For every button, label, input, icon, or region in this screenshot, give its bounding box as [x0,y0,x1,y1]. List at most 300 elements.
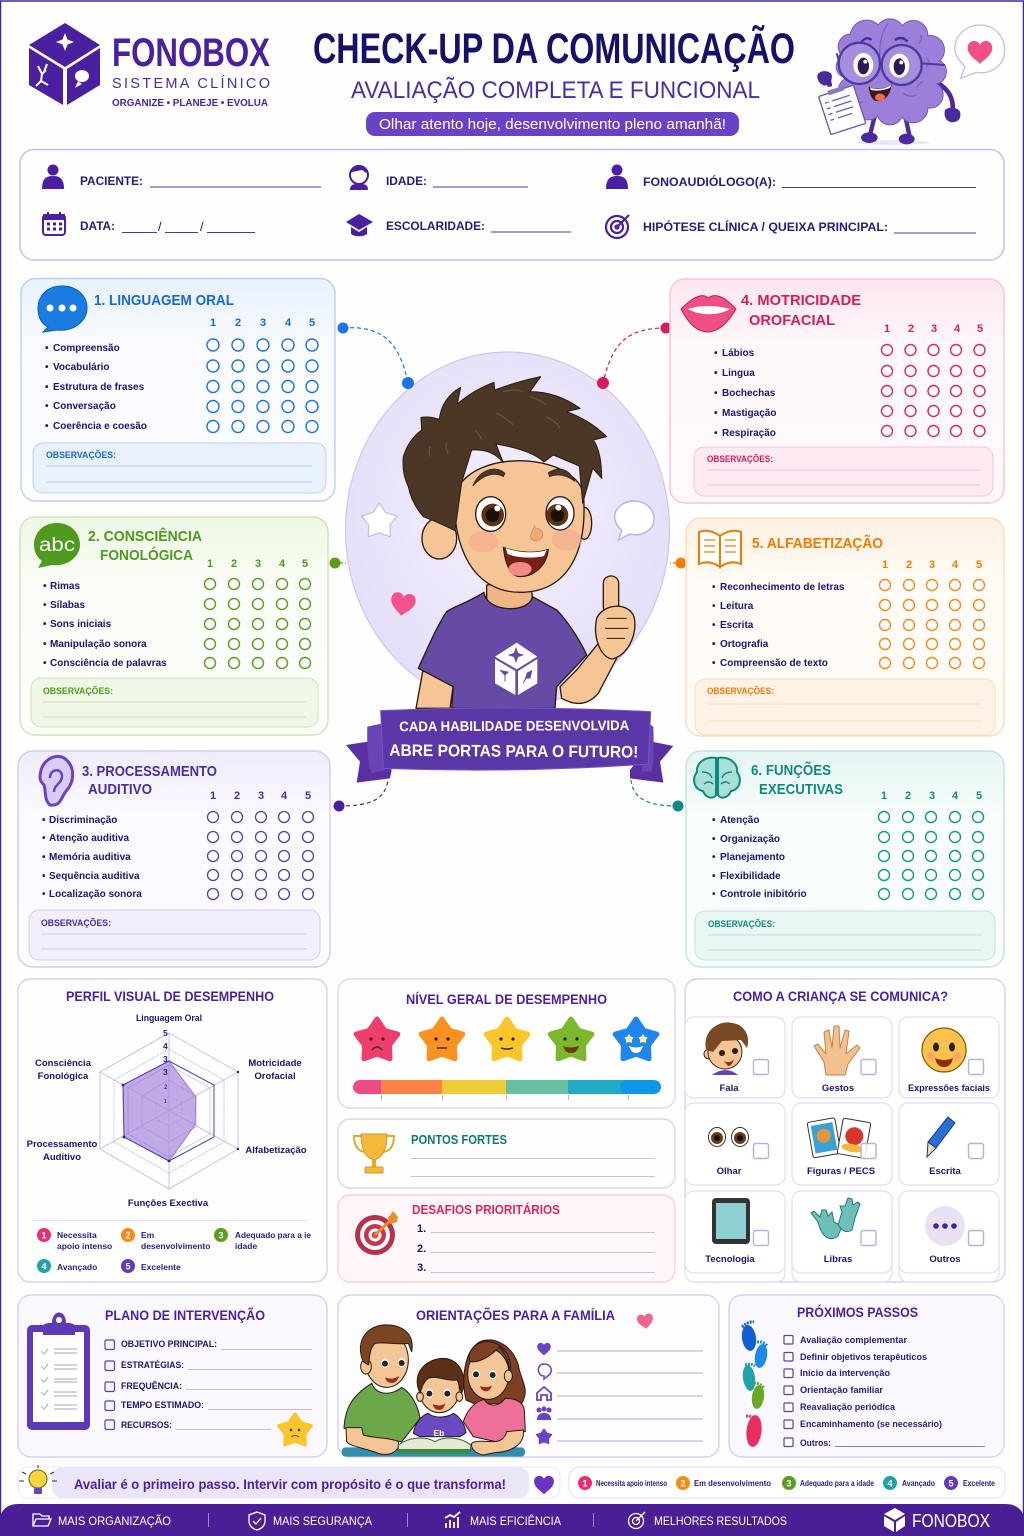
panel: plano de intervencao [18,1295,327,1457]
scale numbers [207,558,308,570]
score legend [37,1228,311,1273]
star: level 5 [615,1019,657,1059]
heading: EXECUTIVAS [759,781,843,798]
option: tecnologia [705,1198,755,1265]
skills list: Controle inibitório [720,889,807,900]
icon: child [350,165,368,190]
icon: star [279,1414,311,1445]
skills list: • [712,601,716,612]
icon: folder [33,1514,51,1526]
field: data: / [200,219,204,234]
rating circles [208,812,314,900]
skills list [43,581,167,669]
radar chart: 3 [163,1054,168,1064]
skills list: Lábios [722,348,755,359]
legend item 4: Avançado [902,1478,935,1488]
icon: logo cube [29,23,100,105]
legend bar [569,1467,1005,1498]
legend item 3: Adequado para a idade [800,1478,874,1488]
scale numbers [210,790,311,802]
legend item 1: 1 [582,1478,588,1488]
skills list: Compreensão [53,343,120,354]
icon: clipboard [27,1312,90,1430]
score legend: apoio intenso [57,1241,112,1251]
skills list: Flexibilidade [720,871,781,882]
banner text: CADA HABILIDADE DESENVOLVIDA [399,717,629,734]
checklist: Reavaliação periódica [800,1402,896,1412]
scale numbers: 1 [210,317,216,329]
tagline: SISTEMA CLÍNICO [112,75,270,92]
legend item 2: 2 [680,1478,686,1488]
label: MAIS EFICIÊNCIA [470,1513,561,1528]
skills list: Sílabas [50,600,85,611]
rating circles [207,339,318,432]
heading: PRÓXIMOS PASSOS [797,1303,918,1320]
icon: abc bubble [34,523,80,568]
checklist: Avaliação complementar [800,1335,907,1345]
panel: como a crianca se comunica [685,979,1005,1282]
panel: 6 funcoes executivas [686,751,1004,967]
star: level 3 [486,1019,528,1059]
scale numbers: 2 [908,323,914,335]
heading [751,761,843,798]
skills list: • [43,658,47,669]
decor: heart [389,591,417,618]
icon: ear [40,756,73,805]
field: idade: IDADE: [386,174,427,188]
field: hipotese: HIPÓTESE CLÍNICA / QUEIXA PRINCIPAL: [643,219,888,234]
skills list: Planejamento [720,852,785,863]
scale numbers: 5 [976,790,982,802]
heading: ORIENTAÇÕES PARA A FAMÍLIA [416,1306,615,1323]
icon: shield [249,1512,265,1530]
scale numbers: 2 [234,790,240,802]
option: outros [925,1206,965,1265]
scale numbers: 5 [309,317,315,329]
legend item 1: Necessita apoio intenso [596,1478,667,1488]
legend item 1 [578,1476,667,1490]
score legend: Excelente [141,1262,181,1272]
lines [557,1351,703,1441]
radar chart: 3 [163,1067,168,1077]
checklist: ESTRATÉGIAS: [121,1360,184,1371]
heading [741,292,861,329]
panel: orientacoes para a familia [338,1295,719,1457]
radar chart [27,1013,307,1209]
observations box: OBSERVAÇÕES: [46,450,116,461]
panel: 2 consciencia fonologica [20,517,328,735]
scale numbers: 5 [302,558,308,570]
observations box [31,678,318,727]
scale numbers: 5 [976,559,982,571]
skills list: • [712,889,716,900]
scale numbers: 1 [884,323,890,335]
skills list: • [712,834,716,845]
axis label: Auditivo [43,1152,81,1163]
icon: target [628,1512,645,1528]
skills list: • [714,408,718,419]
skills list: Escrita [720,620,754,631]
mascot: brain with glasses [817,19,1005,145]
skills list [45,343,147,432]
title: CHECK-UP DA COMUNICAÇÃO [313,25,795,73]
checklist: Início da intervenção [800,1368,890,1378]
checkboxes [754,1060,984,1246]
skills list: Localização sonora [49,889,142,900]
heading: PLANO DE INTERVENÇÃO [105,1306,265,1323]
field: fonoaudiologo: FONOAUDIÓLOGO(A): [643,174,776,189]
footer bar [0,1504,1024,1536]
icon: brain [694,758,740,798]
brand: FONOBOX [912,1511,990,1531]
rating circles [204,578,310,668]
slogan: ORGANIZE • PLANEJE • EVOLUA [112,97,268,109]
score legend: 5 [125,1262,131,1272]
option: gestos: Gestos [822,1083,854,1094]
option: fala: Fala [719,1083,739,1094]
observations box: OBSERVAÇÕES: [41,918,111,929]
axis label [35,1058,92,1082]
score legend: 4 [41,1262,47,1272]
rating circles [880,580,984,668]
skills list: • [712,658,716,669]
field: data: DATA: [80,219,115,233]
decor: white star [362,503,397,537]
icon: open book [699,531,741,567]
legend item 5 [944,1476,995,1490]
option: fala [704,1022,748,1094]
option: figuras / pecs [807,1118,875,1177]
skills list: • [42,815,46,826]
panel: proximos passos [729,1295,1004,1457]
scale numbers: 4 [954,323,961,335]
skills list: • [712,852,716,863]
axis label: Processamento [27,1139,98,1150]
field: paciente: PACIENTE: [80,174,143,188]
scale numbers: 2 [906,559,912,571]
option: expressoes faciais [908,1028,990,1094]
panel: 1 linguagem oral [21,278,335,501]
scale numbers: 4 [952,790,959,802]
skills list: Conversação [53,401,116,412]
heading: 3. PROCESSAMENTO [82,763,217,780]
scale numbers [884,323,983,335]
score legend: desenvolvimento [141,1241,210,1251]
option: tecnologia: Tecnologia [705,1254,755,1265]
numbered lines: 1. [417,1223,426,1235]
observations box [33,443,326,493]
quote bar [18,1465,560,1498]
banner text emphasis: ABRE PORTAS PARA O FUTURO! [389,741,638,762]
option: expressoes faciais: Expressões faciais [908,1083,990,1094]
icon: heart [636,1313,654,1330]
scale numbers: 4 [279,558,286,570]
scale numbers: 3 [929,559,935,571]
scale numbers: 4 [952,559,959,571]
axis label [27,1139,98,1163]
scale numbers: 4 [281,790,288,802]
skills list: Rimas [50,581,80,592]
field: escolaridade: ESCOLARIDADE: [386,219,485,233]
skills list: Lingua [722,368,755,379]
field: data: / [158,219,162,234]
skills list: Coerência e coesão [53,421,147,432]
skills list: Vocabulário [53,362,110,373]
icon: target [355,1211,398,1255]
icon: abc bubble: abc [39,535,75,556]
legend item 4: 4 [887,1478,893,1488]
heading: PONTOS FORTES [411,1133,507,1147]
icon: chart [445,1512,460,1528]
connector: linguagem oral [338,322,414,389]
observations box [29,910,320,960]
skills list: Discriminação [49,815,117,826]
skills list [714,348,776,439]
numbered lines [417,1223,655,1274]
star: level 2 [421,1019,463,1059]
observations box [695,911,995,960]
scale numbers: 3 [931,323,937,335]
label: MAIS ORGANIZAÇÃO [58,1514,171,1528]
heading: 4. MOTRICIDADE [741,292,861,309]
field: data [80,219,255,234]
logo: Fonobox [29,23,270,109]
numbered lines: 3. [417,1262,426,1274]
skills list: • [714,368,718,379]
heading: NÍVEL GERAL DE DESEMPENHO [406,992,607,1007]
skills list [712,582,845,669]
decor: speech bubble [615,501,654,540]
heading: PERFIL VISUAL DE DESEMPENHO [66,989,274,1004]
heading: COMO A CRIANÇA SE COMUNICA? [733,989,948,1004]
patient information panel [20,150,1004,260]
icon: lips [681,296,736,332]
scale numbers [881,790,982,802]
illustration: family reading [342,1325,525,1457]
skills list: • [712,639,716,650]
score legend: 1 [41,1230,47,1240]
connector: alfabetizacao [670,558,686,568]
connector: processamento [334,780,388,812]
skills list: • [712,620,716,631]
central illustration halo [346,352,670,708]
icon: clinician [606,164,628,189]
scale numbers: 3 [255,558,261,570]
observations box: OBSERVAÇÕES: [43,686,113,697]
skills list: Sequência auditiva [49,871,140,882]
scale numbers: 1 [210,790,216,802]
panel: perfil visual [18,979,327,1282]
skills list: Bochechas [722,388,776,399]
option: escrita: Escrita [929,1166,962,1177]
skills list: • [45,382,49,393]
scale numbers: 2 [235,317,241,329]
skills list: • [42,871,46,882]
legend item 3: 3 [786,1478,792,1488]
connector: funcoes [631,780,684,812]
legend item 5: Excelente [963,1478,995,1488]
radar chart: 1 [164,1099,167,1105]
heading: 6. FUNÇÕES [751,761,831,779]
skills list: Manipulação sonora [50,639,147,650]
star: level 4 [550,1019,592,1059]
skills list: • [714,388,718,399]
legend item 2: Em desenvolvimento [694,1478,771,1488]
radar chart: 4 [163,1041,168,1051]
checklist: OBJETIVO PRINCIPAL: [121,1339,217,1350]
score legend: Em [141,1230,155,1240]
checklist [105,1339,312,1431]
heading: AUDITIVO [88,781,152,798]
skills list: Reconhecimento de letras [720,582,845,593]
shirt logo cube [495,643,537,695]
icon: footprints [740,1322,769,1448]
subtitle: AVALIAÇÃO COMPLETA E FUNCIONAL [351,77,760,104]
radar chart: 5 [163,1028,168,1038]
observations box [695,679,995,735]
skills list: • [712,871,716,882]
connector: consciencia [330,558,346,568]
icon: person [42,164,64,189]
tagline pill [366,112,739,136]
axis label: Alfabetização [245,1145,307,1156]
skills list: Estrutura de frases [53,382,145,393]
observations box [694,447,993,496]
skills list: Ortografia [720,639,769,650]
skills list: Compreensão de texto [720,658,828,669]
skills list: • [712,815,716,826]
icon: heart [534,1476,554,1494]
score legend: Necessita [57,1230,97,1240]
numbered lines: 2. [417,1243,426,1255]
connector: motricidade [597,322,672,389]
option: figuras / pecs: Figuras / PECS [807,1166,875,1177]
quote text: Avaliar é o primeiro passo. Intervir com propósito é o que transforma! [74,1476,506,1492]
checklist: TEMPO ESTIMADO: [121,1400,204,1411]
scale numbers [210,317,315,329]
skills list: • [45,401,49,412]
speech bubble with heart [955,25,1005,78]
heading [88,527,202,564]
hair [403,377,607,531]
panel: 4 motricidade orofacial [670,279,1004,503]
skills list: • [42,852,46,863]
skills list: • [45,362,49,373]
icon: calendar [43,212,65,235]
skills list: • [714,428,718,439]
scale numbers: 3 [258,790,264,802]
heading: 5. ALFABETIZAÇÃO [752,534,883,552]
performance bar [353,1080,661,1100]
checklist: Orientação familiar [800,1385,883,1395]
family icons [536,1343,552,1443]
scale numbers [882,559,982,571]
tagline pill: Olhar atento hoje, desenvolvimento pleno amanhã! [379,116,726,133]
skills list: • [42,889,46,900]
illustration: boy with thumbs up [346,377,673,783]
score legend: idade [235,1241,257,1251]
heading: 2. CONSCIÊNCIA [88,527,202,545]
checklist: RECURSOS: [121,1420,172,1431]
skills list: Mastigação [722,408,776,419]
skills list: Consciência de palavras [50,658,167,669]
label: MAIS SEGURANÇA [273,1514,372,1528]
skills list: Leitura [720,601,754,612]
skills list: Organização [720,834,780,845]
skills list: Memória auditiva [49,852,131,863]
icon: target [606,215,629,238]
panel: 3 processamento auditivo [18,751,330,967]
skills list: • [714,348,718,359]
legend item 4 [883,1476,935,1490]
axis label [248,1058,302,1082]
checklist: FREQUÊNCIA: [121,1380,182,1392]
legend item 5: 5 [948,1478,954,1488]
skills list: Sons iniciais [50,619,112,630]
panel: desafios prioritarios [338,1195,675,1282]
heading: FONOLÓGICA [100,546,193,564]
banner ribbon [346,708,673,783]
heading: 1. LINGUAGEM ORAL [94,292,234,309]
scale numbers: 5 [305,790,311,802]
axis label: Orofacial [254,1071,296,1082]
icon: light bulb [19,1465,57,1494]
checklist [784,1335,985,1448]
skills list: • [43,639,47,650]
radar chart: 2 [164,1085,168,1091]
panel: 5 alfabetizacao [686,518,1004,736]
observations box: OBSERVAÇÕES: [707,686,774,697]
skills list: • [45,421,49,432]
scale numbers: 1 [882,559,888,571]
score legend: Adequado para a ie [235,1230,311,1240]
skills list: Atenção [720,815,759,826]
star: level 1 [356,1019,398,1059]
panel: pontos fortes [338,1119,675,1188]
skills list: Respiração [722,428,776,439]
score legend: 2 [125,1230,131,1240]
score legend: 3 [218,1230,224,1240]
icon: graduation cap [346,214,373,236]
axis label: Linguagem Oral [136,1013,202,1024]
observations box: OBSERVAÇÕES: [707,454,773,465]
skills list: • [43,619,47,630]
checklist: Encaminhamento (se necessário) [800,1419,942,1429]
skills list: Atenção auditiva [49,833,129,844]
observations box: OBSERVAÇÕES: [708,919,775,930]
icon: chat bubble [38,286,87,332]
heading: DESAFIOS PRIORITÁRIOS [412,1202,560,1217]
axis label: Consciência [35,1058,92,1069]
option: libras: Libras [824,1254,852,1265]
wordmark: FONOBOX [112,31,270,75]
scale numbers: 2 [231,558,237,570]
panel: nivel geral [338,979,675,1108]
scale numbers: 3 [929,790,935,802]
scale numbers: 4 [285,317,292,329]
skills list: • [42,833,46,844]
heading [82,763,217,798]
lines [411,1158,655,1176]
scale numbers: 3 [260,317,266,329]
skills list [712,815,807,900]
skills list [42,815,142,900]
rating circles [878,812,984,900]
icon: cube [884,1508,905,1532]
skills list: • [43,581,47,592]
option: gestos [814,1026,860,1094]
skills list: • [712,582,716,593]
